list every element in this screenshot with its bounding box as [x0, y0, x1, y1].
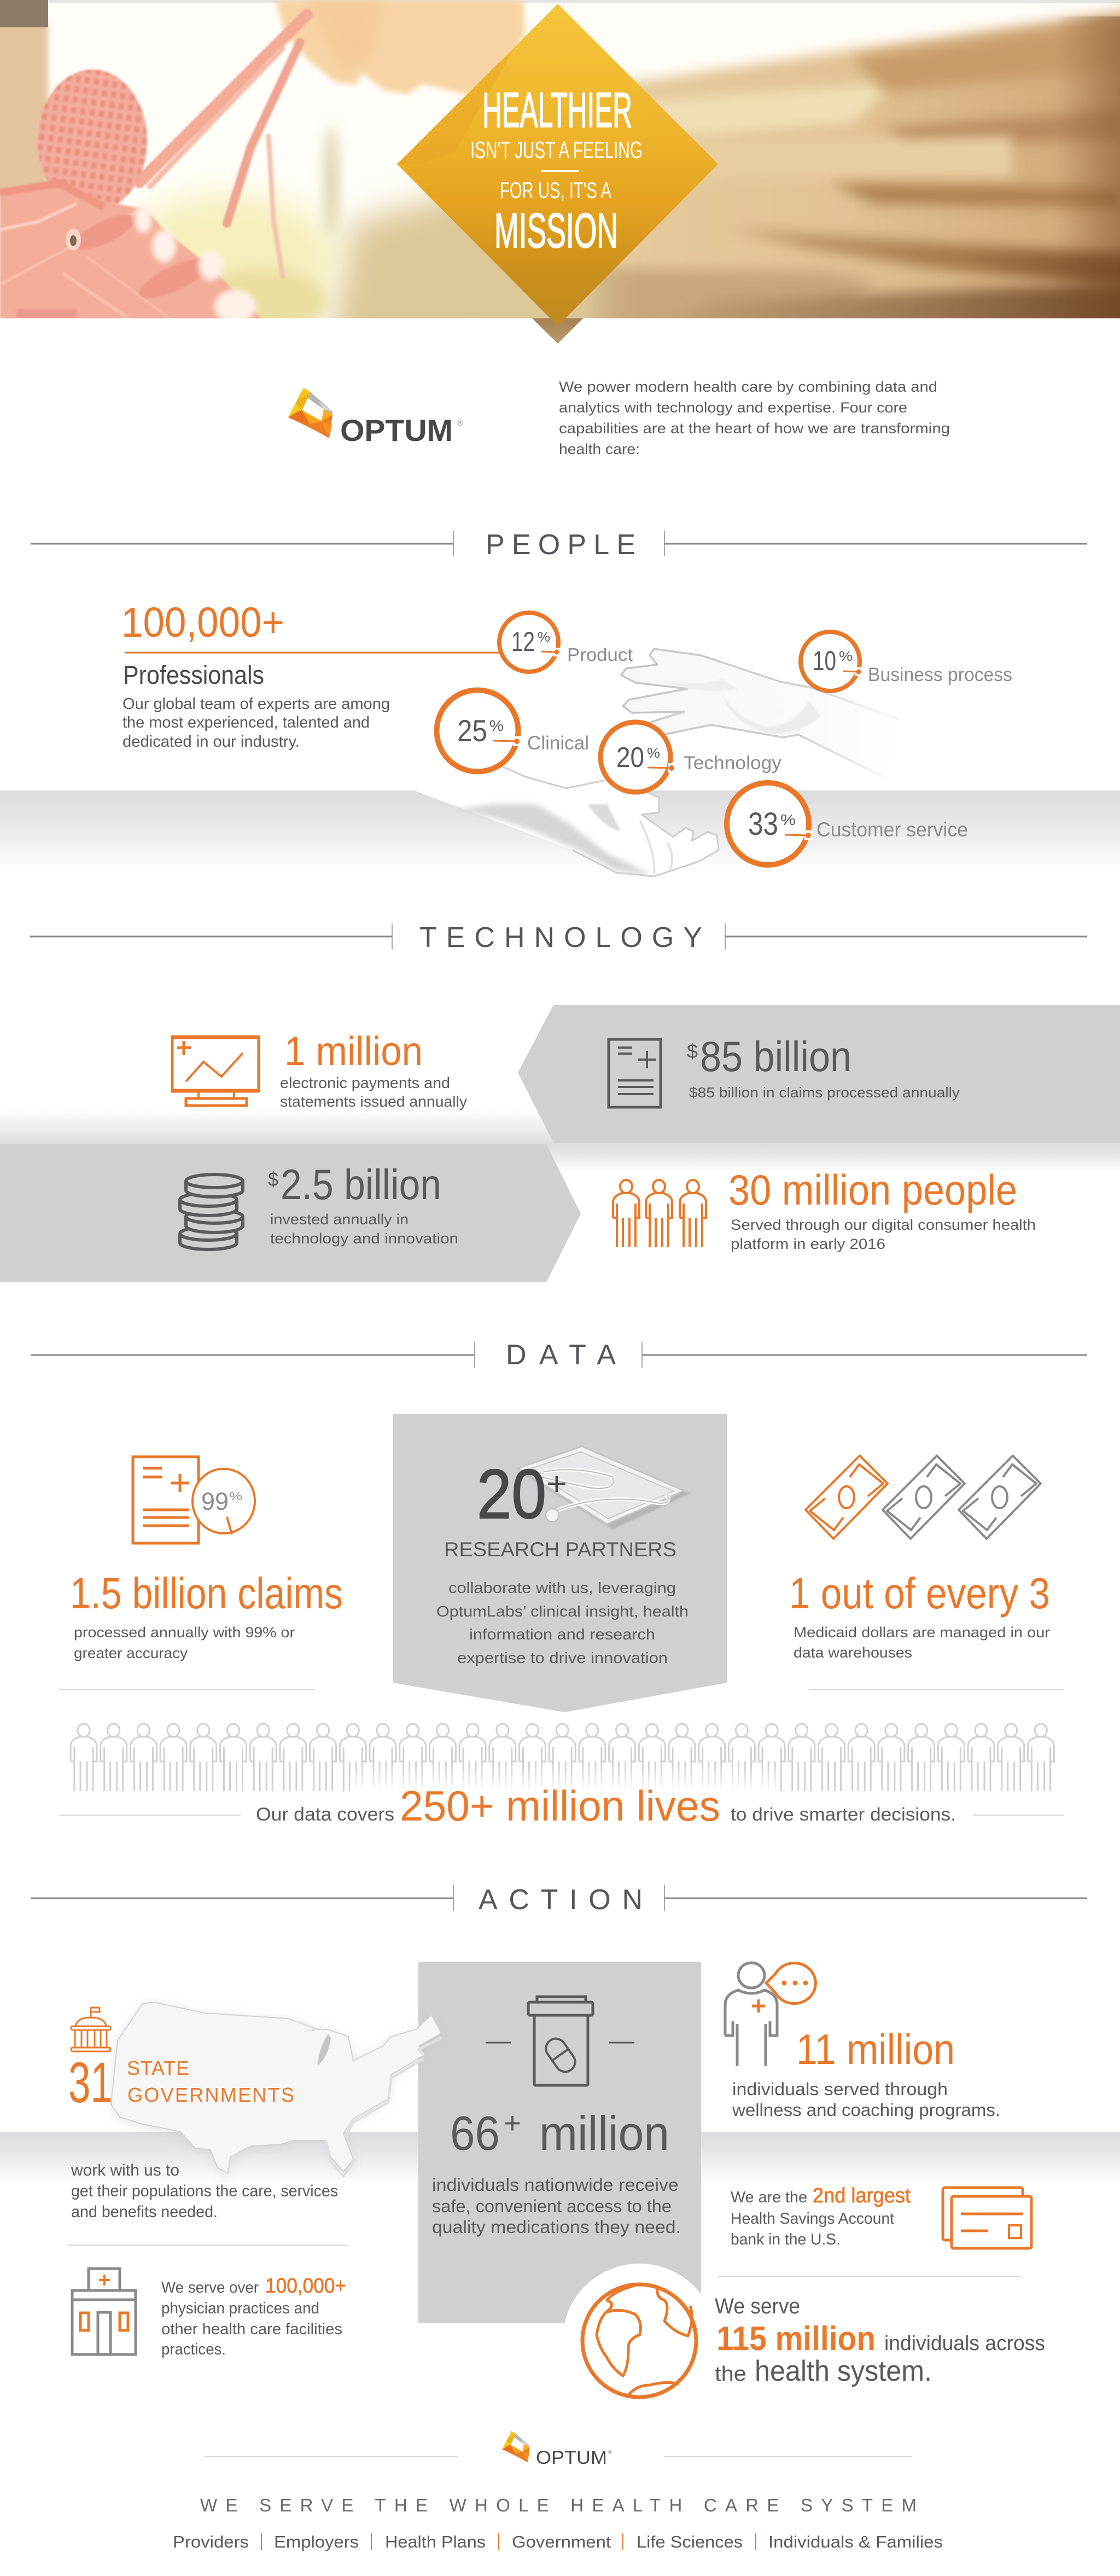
stat: 1 million payments: electronic payments and — [280, 1074, 450, 1091]
footer audience list: Providers — [173, 2532, 249, 2551]
panel: $2.5 billion: 2.5 billion — [281, 1160, 441, 1208]
stat: 30 million people: Served through our digital consumer health — [731, 1217, 1036, 1233]
data coverage statement: 250+ million lives — [400, 1782, 720, 1830]
stat: 31 state governments: and benefits needed. — [71, 2203, 218, 2221]
figure: $ — [687, 1040, 698, 1062]
circle: 10% Business process: 10 — [813, 646, 836, 676]
panel: 20+ research partners: collaborate with us, leveraging — [448, 1579, 676, 1596]
pink laces — [139, 15, 307, 277]
stat: 31 state governments: 31 — [68, 2051, 113, 2115]
stat: 31 state governments — [67, 2008, 348, 2245]
icon: claim document — [609, 1039, 661, 1107]
stat: 115 million individuals — [715, 2294, 1045, 2387]
label: Professionals — [123, 660, 264, 689]
stat: 100,000+ physician practices: 100,000+ — [265, 2275, 346, 2298]
circle: 12% Product: 12 — [511, 626, 535, 657]
section heading: TECHNOLOGY: TECHNOLOGY — [419, 922, 702, 953]
footer logo — [205, 2431, 912, 2468]
panel: 66+ million: million — [539, 2106, 669, 2160]
caption — [270, 1211, 458, 1247]
stat: 100,000+ physician practices: practices. — [161, 2341, 226, 2358]
circle: 33% Customer service: Customer service — [816, 818, 968, 841]
stat: 30 million people — [613, 1166, 1036, 1252]
lower hand illustration — [416, 754, 719, 876]
upper hand illustration — [621, 649, 899, 778]
stat: 1 million payments: statements issued annually — [280, 1093, 467, 1110]
stat: 1 million payments — [171, 1028, 467, 1110]
panel: 66+ million: individuals nationwide receive — [432, 2175, 679, 2195]
icon: document with 99% dial: 99 — [201, 1487, 229, 1515]
intro paragraph: We power modern health care by combining data and — [559, 379, 937, 395]
stat: 115 million individuals: health system. — [755, 2355, 932, 2387]
description — [122, 695, 390, 751]
footer audience list: Health Plans — [385, 2532, 486, 2551]
circle: 25% Clinical: Clinical — [527, 732, 589, 754]
circle: 12% Product: % — [538, 630, 550, 645]
stat: 1 out of every 3: Medicaid dollars are managed in our — [794, 1624, 1050, 1641]
footer audience list: Individuals & Families — [768, 2532, 943, 2551]
icon: three people — [613, 1180, 706, 1247]
icon: payment cards — [943, 2188, 1031, 2248]
icon: hospital building — [72, 2269, 136, 2354]
icon: document with 99% dial: % — [229, 1491, 242, 1503]
stat: 2nd largest HSA bank: bank in the U.S. — [731, 2231, 841, 2248]
icon: coin stack — [180, 1174, 243, 1249]
footer audience list: Employers — [274, 2532, 359, 2551]
circle: 10% Business process: % — [839, 649, 853, 664]
stat: 100,000+ professionals — [121, 599, 499, 751]
footer logo: OPTUM — [536, 2447, 607, 2468]
stat: 100,000+ physician practices — [72, 2269, 346, 2358]
stat: 115 million individuals: the — [715, 2363, 746, 2386]
circle: 33% Customer service: 33 — [748, 806, 778, 842]
panel: 20+ research partners — [393, 1414, 727, 1712]
stat: 1 out of every 3: 1 out of every 3 — [789, 1569, 1050, 1618]
grey gradient band: people — [0, 790, 1120, 874]
panel: 20+ research partners: expertise to drive innovation — [457, 1649, 668, 1666]
panel: $2.5 billion — [0, 1144, 581, 1282]
gradient band: technology left — [0, 1109, 558, 1144]
footer audience list: Government — [512, 2532, 611, 2551]
description: Our global team of experts are among — [122, 695, 390, 713]
section heading: PEOPLE: PEOPLE — [486, 529, 635, 561]
stat: 30 million people: platform in early 2016 — [731, 1236, 885, 1252]
panel: 66+ million: + — [504, 2107, 521, 2139]
caption: technology and innovation — [270, 1230, 458, 1247]
intro paragraph: capabilities are at the heart of how we are transforming — [559, 420, 950, 437]
people row: 250 million lives — [71, 1724, 1054, 1791]
icon: document with 99% dial — [133, 1457, 255, 1543]
stat: 1.5 billion claims: greater accuracy — [74, 1645, 188, 1661]
footer tagline: WE SERVE THE WHOLE HEALTH CARE SYSTEM — [200, 2495, 917, 2515]
gradient band: technology right — [541, 1143, 1120, 1173]
caption: $85 billion in claims processed annually — [689, 1084, 960, 1101]
headline word MISSION: MISSION — [494, 203, 618, 258]
panel: 66+ million: quality medications they need. — [432, 2217, 681, 2237]
Optum logo: OPTUM — [340, 413, 453, 447]
headline word HEALTHIER: HEALTHIER — [482, 83, 632, 138]
panel: 20+ research partners: RESEARCH PARTNERS — [444, 1538, 676, 1561]
Optum logo: ® — [457, 418, 463, 428]
stat: 11 million coaching: wellness and coaching programs. — [732, 2100, 1000, 2120]
data coverage statement: to drive smarter decisions. — [731, 1804, 956, 1824]
stat: 11 million coaching: individuals served through — [732, 2079, 948, 2099]
stat: 1.5 billion claims: 1.5 billion claims — [70, 1569, 343, 1618]
circle: 12% Product — [499, 613, 633, 672]
intro paragraph: health care: — [559, 441, 640, 457]
footer audience list: Life Sciences — [637, 2532, 743, 2551]
stat: 1 out of every 3 — [789, 1456, 1064, 1689]
stat: 31 state governments: GOVERNMENTS — [127, 2084, 294, 2106]
stat: 2nd largest HSA bank: We are the — [731, 2189, 807, 2206]
circle: 20% Technology: 20 — [616, 742, 644, 774]
circle: 20% Technology: % — [647, 745, 660, 761]
panel: $85 billion: 85 billion — [700, 1032, 851, 1080]
icon: monitor — [171, 1037, 259, 1106]
circle: 25% Clinical: 25 — [457, 713, 487, 748]
circle: 10% Business process — [801, 632, 1012, 691]
stat: 31 state governments: STATE — [127, 2057, 189, 2079]
data coverage statement — [59, 1782, 1064, 1830]
stat: 115 million individuals: We serve — [715, 2294, 800, 2318]
stat: 2nd largest HSA bank — [718, 2184, 1031, 2276]
circle: 10% Business process: Business process — [868, 664, 1012, 685]
caption: invested annually in — [270, 1211, 409, 1228]
circle: 33% Customer service — [727, 783, 968, 865]
stat: 11 million coaching — [725, 1963, 1000, 2120]
stat: 30 million people: 30 million people — [728, 1166, 1017, 1214]
section heading: DATA: DATA — [506, 1339, 616, 1371]
stat: 1.5 billion claims — [59, 1457, 343, 1689]
subhead for us: FOR US, IT'S A — [500, 177, 611, 203]
icon: tablet and stethoscope — [518, 1446, 690, 1530]
stat: 31 state governments: work with us to — [71, 2161, 179, 2179]
panel: 66+ million — [418, 1962, 701, 2323]
subhead isn't just a feeling: ISN'T JUST A FEELING — [470, 137, 643, 164]
data coverage statement: Our data covers — [256, 1804, 394, 1825]
footer audience list — [173, 2532, 943, 2551]
circle: 20% Technology — [600, 722, 781, 792]
stat: 2nd largest HSA bank: Health Savings Account — [731, 2210, 894, 2228]
stat: 115 million individuals: 115 million — [716, 2320, 876, 2358]
circle: 25% Clinical — [436, 690, 589, 771]
figure: $ — [268, 1168, 278, 1190]
Optum logo — [288, 388, 463, 447]
icon: capitol building — [71, 2008, 110, 2051]
stat: 31 state governments: get their populations the care, services — [71, 2182, 338, 2200]
hero photo: shoe and laces — [0, 0, 1120, 350]
description: the most experienced, talented and — [122, 714, 370, 731]
panel: 20+ research partners: OptumLabs’ clinical insight, health — [436, 1603, 689, 1620]
panel: 66+ million: safe, convenient access to the — [432, 2196, 672, 2216]
stat: 100,000+ physician practices: We serve over — [161, 2279, 259, 2296]
stat: 11 million coaching: 11 million — [796, 2025, 955, 2073]
stat: 2nd largest HSA bank: 2nd largest — [813, 2184, 911, 2207]
circle: 12% Product: Product — [567, 644, 633, 665]
panel: $85 billion — [518, 1005, 1120, 1143]
icon: globe — [582, 2284, 696, 2397]
footer logo: ® — [608, 2450, 612, 2456]
fade over people legs — [350, 1764, 777, 1793]
stat: 100,000+ physician practices: other health care facilities — [161, 2321, 342, 2338]
icon: three dollar bills — [806, 1456, 1041, 1539]
intro paragraph: analytics with technology and expertise. Four core — [559, 399, 907, 416]
grey gradient band: action — [0, 2132, 1120, 2185]
number: 100,000+ — [121, 599, 284, 646]
intro paragraph — [559, 379, 950, 457]
panel: 20+ research partners: 20 — [477, 1455, 546, 1533]
stat: 1.5 billion claims: processed annually with 99% or — [74, 1624, 295, 1641]
panel: 66+ million: 66 — [450, 2106, 500, 2160]
icon: pill bottle — [486, 1997, 634, 2085]
panel: 20+ research partners: information and research — [469, 1626, 655, 1643]
stat: 115 million individuals: individuals across — [884, 2332, 1045, 2355]
hero brown tail under diamond — [532, 318, 583, 344]
headline diamond — [397, 4, 718, 326]
stat: 1 out of every 3: data warehouses — [794, 1644, 912, 1661]
stat: 1 million payments: 1 million — [284, 1028, 423, 1074]
US map illustration — [111, 2002, 441, 2176]
panel: 20+ research partners: + — [546, 1466, 567, 1502]
circle: 20% Technology: Technology — [684, 753, 781, 774]
stat: 100,000+ physician practices: physician practices and — [161, 2300, 319, 2317]
globe with white notch — [564, 2264, 701, 2418]
description: dedicated in our industry. — [122, 733, 300, 751]
section heading: ACTION: ACTION — [479, 1884, 643, 1916]
circle: 33% Customer service: % — [780, 811, 796, 828]
circle: 25% Clinical: % — [489, 717, 504, 734]
icon: person with speech bubble — [725, 1963, 815, 2066]
